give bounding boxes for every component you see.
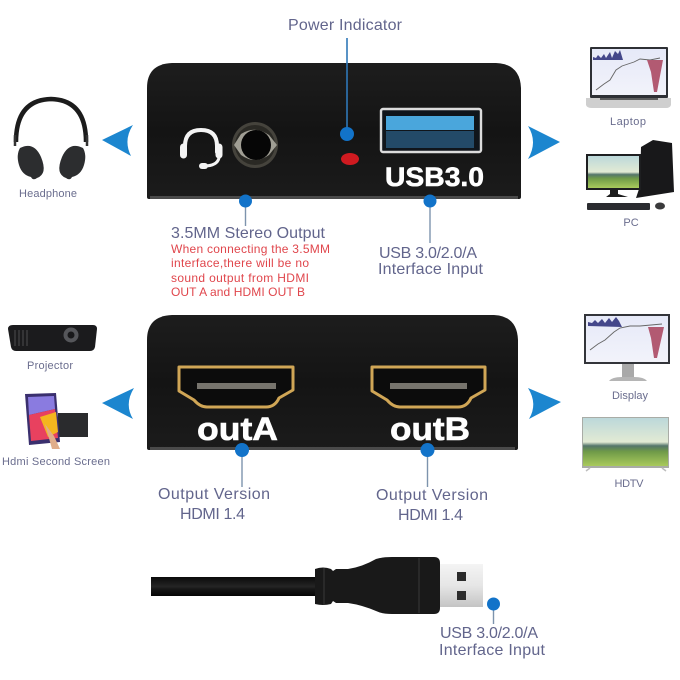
arrow: bottom left bbox=[102, 388, 134, 419]
outB label: outB bbox=[390, 411, 470, 447]
callout: output B version: Output Version bbox=[376, 487, 488, 504]
USB3.0 label: USB3.0 bbox=[385, 162, 484, 192]
device: projector bbox=[8, 325, 97, 372]
panel: top device, audio and USB input side bbox=[147, 63, 521, 199]
moulded connector bbox=[315, 557, 440, 614]
device: display bbox=[584, 314, 670, 402]
callout: power indicator bbox=[288, 17, 403, 141]
device body bottom bbox=[147, 315, 518, 450]
HDMI port A bbox=[179, 367, 293, 407]
USB cable and plug bbox=[151, 557, 483, 614]
callout: USB input on device bbox=[378, 194, 484, 278]
device: HDTV: HDTV bbox=[614, 478, 644, 490]
device lower lip bottom bbox=[150, 447, 515, 450]
callout: output A version: HDMI 1.4 bbox=[180, 506, 245, 523]
device body top bbox=[147, 63, 521, 199]
HDMI port B bbox=[372, 367, 485, 407]
callout: output A version bbox=[158, 443, 270, 523]
device: HDMI second screen bbox=[2, 393, 110, 468]
outA label: outA bbox=[197, 411, 278, 447]
USB 3.0 port bbox=[381, 109, 481, 152]
device: HDMI second screen: Hdmi Second Screen bbox=[2, 456, 110, 468]
red power LED bbox=[341, 153, 359, 165]
connector ridges bbox=[324, 558, 419, 613]
callout: USB input on cable bbox=[439, 598, 546, 659]
arrow: top left bbox=[102, 125, 133, 156]
callout: 3.5mm stereo output: sound output from HDMI bbox=[171, 271, 309, 285]
device: display: Display bbox=[612, 390, 648, 402]
arrow: top right bbox=[528, 126, 560, 159]
device: laptop bbox=[586, 47, 671, 128]
callout: USB input on cable: USB 3.0/2.0/A bbox=[440, 625, 538, 642]
callout: USB input on device: Interface Input bbox=[378, 261, 484, 278]
callout: 3.5mm stereo output bbox=[171, 194, 330, 299]
callout: output B version: HDMI 1.4 bbox=[398, 507, 463, 524]
callout: USB input on cable: Interface Input bbox=[439, 642, 546, 659]
device: headphone bbox=[15, 99, 87, 200]
cable bbox=[151, 577, 317, 596]
device: PC bbox=[586, 140, 674, 229]
callout: 3.5mm stereo output: 3.5MM Stereo Output bbox=[171, 225, 326, 242]
callout: power indicator: Power Indicator bbox=[288, 17, 403, 34]
device lower lip top bbox=[150, 196, 518, 199]
device: projector: Projector bbox=[27, 360, 73, 372]
callout: output B version bbox=[376, 443, 488, 524]
callout: 3.5mm stereo output: When connecting the 3.5MM bbox=[171, 242, 330, 256]
callout: 3.5mm stereo output: interface,there will be no bbox=[171, 256, 309, 270]
device: headphone: Headphone bbox=[19, 188, 77, 200]
device: HDTV bbox=[582, 417, 669, 490]
3.5mm audio jack bbox=[232, 122, 278, 168]
callout: USB input on device: USB 3.0/2.0/A bbox=[379, 245, 477, 262]
device: PC: PC bbox=[623, 217, 639, 229]
headset icon bbox=[184, 130, 219, 166]
metal plug bbox=[438, 564, 483, 607]
callout: output A version: Output Version bbox=[158, 486, 270, 503]
callout: 3.5mm stereo output: OUT A and HDMI OUT B bbox=[171, 285, 305, 299]
panel: bottom device, HDMI outputs side bbox=[147, 315, 518, 450]
device: laptop: Laptop bbox=[610, 116, 646, 128]
arrow: bottom right bbox=[528, 388, 561, 419]
